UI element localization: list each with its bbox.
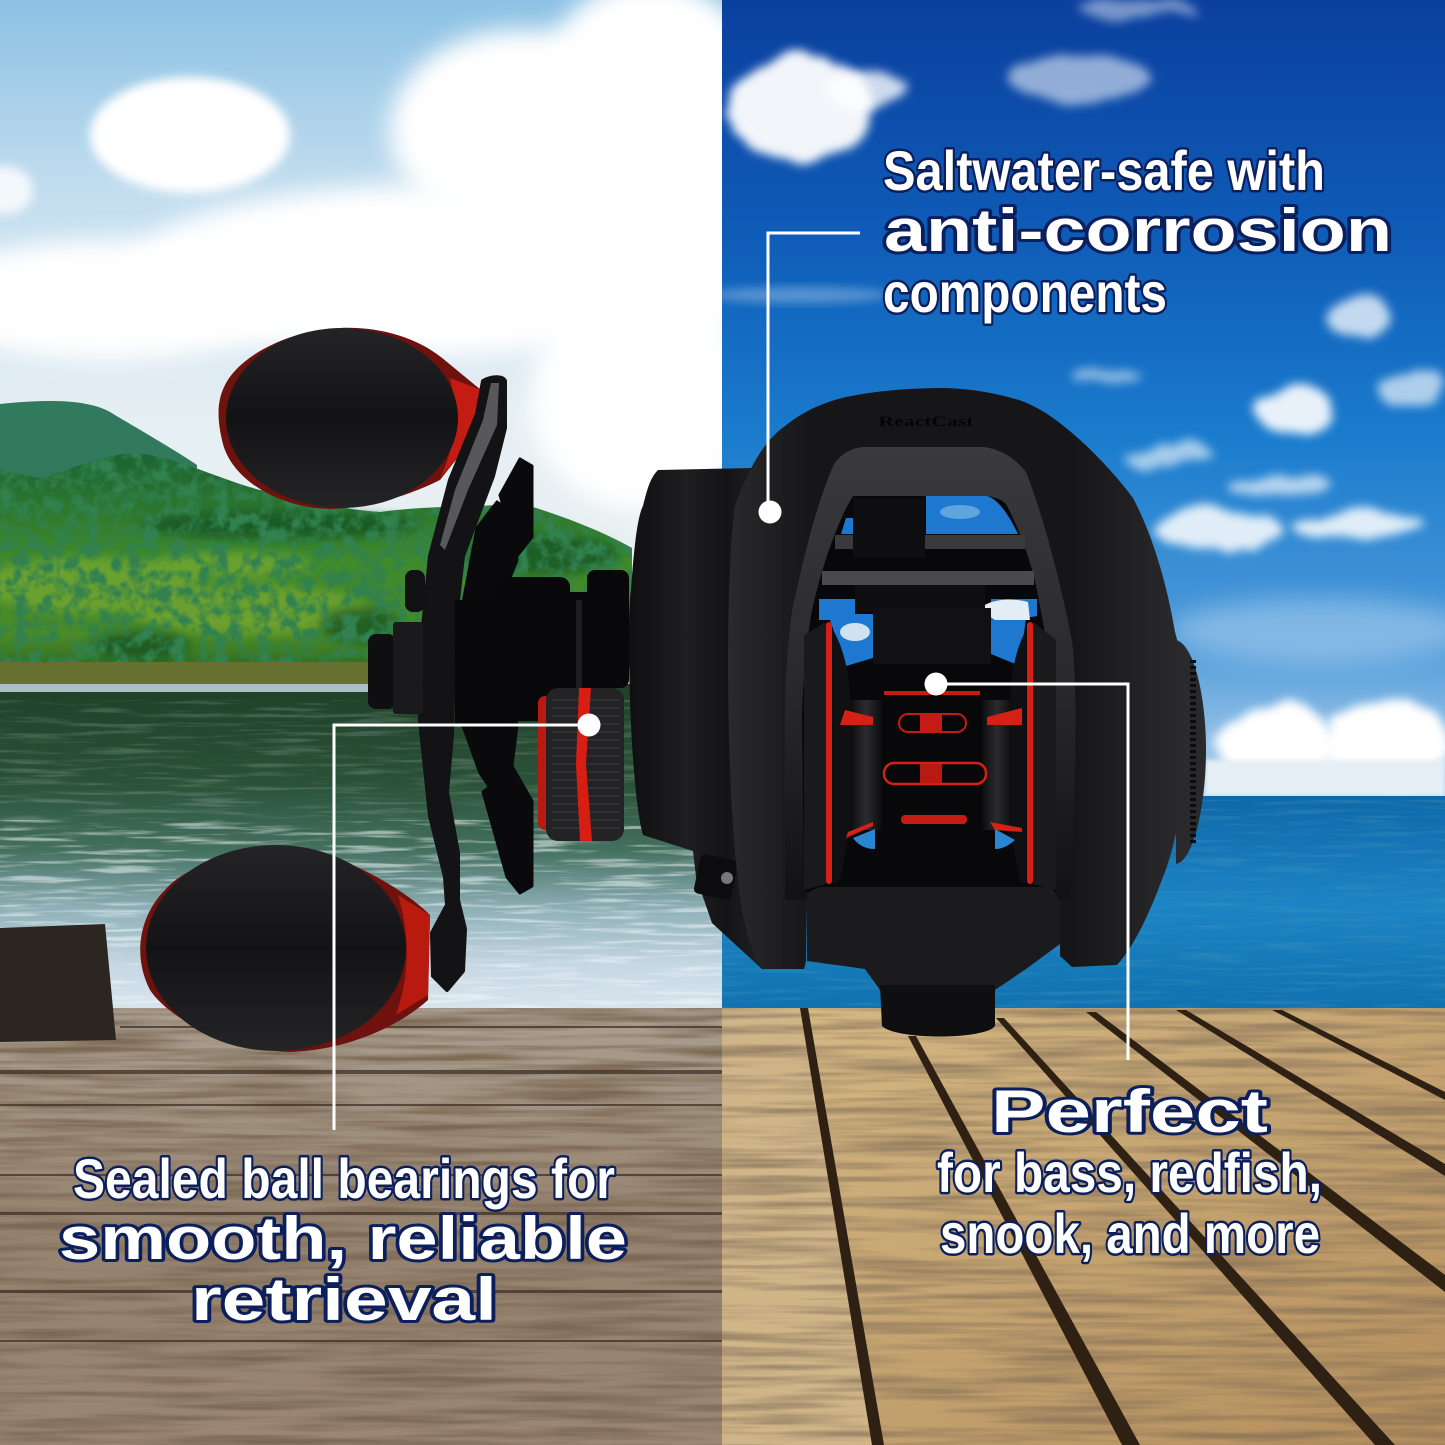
retaining nut (368, 570, 425, 714)
forested hill (0, 453, 632, 668)
text block: perfect for (937, 1078, 1322, 1265)
sky through frame (819, 496, 1037, 666)
reel product (140, 328, 1206, 1052)
star drag (463, 459, 532, 893)
text block: perfect for: snook, and more (940, 1202, 1320, 1265)
inner frame arch (785, 447, 1076, 900)
wooden post (0, 924, 116, 1042)
handle arm (420, 377, 505, 990)
knurled drag knob (538, 688, 624, 841)
panel: saltwater ocean scene (710, 0, 1445, 1445)
side drag wheel (1176, 640, 1206, 864)
callout line: perfect for (924, 672, 1128, 1060)
text block: perfect for: for bass, redfish, (937, 1141, 1322, 1204)
text block: sealed ball bearings: smooth, reliable (59, 1205, 627, 1272)
ocean (722, 796, 1445, 1016)
callout line: anti-corrosion (758, 233, 860, 524)
frame window interior (802, 496, 1056, 892)
text block: saltwater-safe: components (883, 261, 1167, 324)
text block: saltwater-safe (883, 139, 1392, 324)
logo: ReactCast (878, 414, 974, 430)
bottom handle knob (140, 845, 430, 1052)
rods (835, 535, 1025, 549)
dock planks, left (0, 1008, 722, 1445)
top handle knob (219, 328, 481, 509)
text block: saltwater-safe: anti-corrosion (884, 197, 1392, 264)
clouds: left sky (0, 0, 760, 510)
back mountain (0, 401, 197, 480)
text block: sealed ball bearings (59, 1147, 627, 1333)
text block: sealed ball bearings: retrieval (191, 1266, 497, 1333)
clouds: right sky (710, 0, 1445, 796)
foot (807, 887, 1060, 1036)
dock planks, right (722, 1008, 1445, 1445)
lake water (0, 684, 722, 1016)
handle hub (455, 570, 629, 725)
side plate (629, 468, 790, 969)
text block: saltwater-safe: Saltwater-safe with (883, 139, 1325, 202)
reed shoreline (0, 662, 370, 684)
spool with red accents (804, 622, 1056, 890)
text block: sealed ball bearings: Sealed ball bearings for (73, 1147, 615, 1210)
text block: perfect for: Perfect (991, 1078, 1268, 1145)
frame body (728, 388, 1190, 969)
callout line: sealed bearings (334, 714, 600, 1130)
panel: freshwater lake scene (0, 0, 760, 1445)
